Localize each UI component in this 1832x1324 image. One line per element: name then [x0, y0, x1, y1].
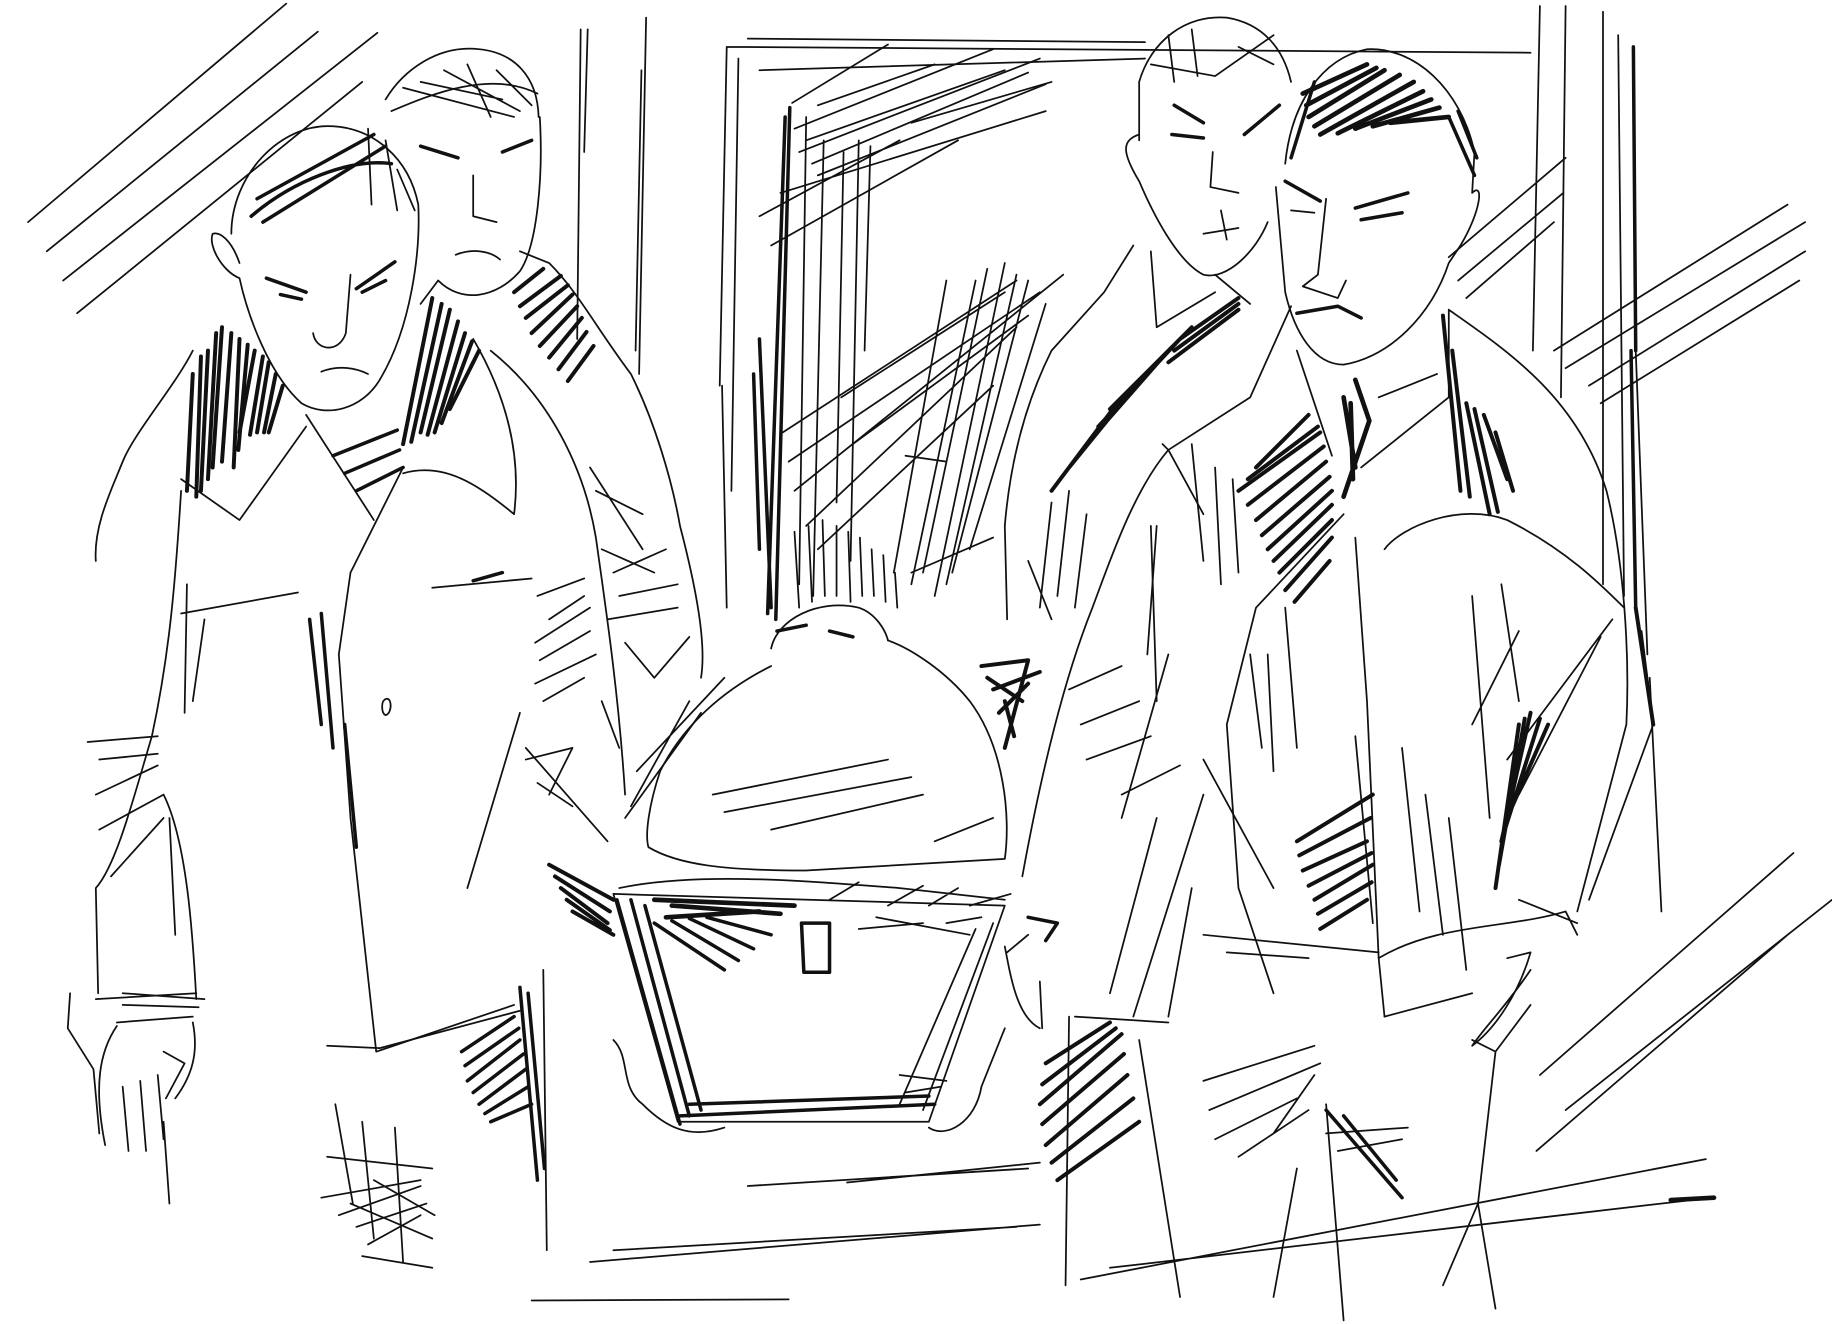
right sleeve hatching — [1472, 584, 1653, 900]
hair and head — [1276, 49, 1479, 365]
dark shoulder hatching — [514, 269, 594, 381]
collar and shirt — [181, 339, 516, 520]
dark hatching at right shoulder — [981, 660, 1040, 748]
dark hair — [1303, 64, 1449, 134]
floor lines — [532, 1159, 1714, 1301]
dark trouser hatching — [1040, 1022, 1139, 1180]
head — [212, 126, 419, 410]
jacket outline — [1022, 310, 1627, 911]
background hatching top left — [28, 4, 377, 313]
legs — [1066, 1017, 1496, 1320]
dark collar hatching — [403, 298, 479, 444]
collar and tie — [1163, 306, 1449, 514]
background window and hatching — [720, 39, 1531, 619]
hand — [68, 993, 195, 1204]
figure: back right man — [1005, 17, 1291, 993]
face — [1285, 181, 1408, 220]
dark shoulder hatching — [1443, 316, 1513, 514]
background vertical door frame left — [577, 18, 646, 374]
dark chest hatching — [1238, 415, 1332, 602]
dark coat hatching — [1297, 795, 1373, 929]
dark lid shading — [654, 900, 794, 917]
left sleeve — [88, 736, 196, 999]
figure: front right man — [1022, 49, 1653, 1320]
background hatching bottom right — [1536, 853, 1832, 1151]
figure: back left man — [386, 49, 703, 748]
right arm hatching — [535, 578, 596, 701]
dark trouser hatching — [462, 987, 544, 1180]
coat hem and lower — [1379, 911, 1577, 1017]
figure: front left man — [68, 126, 625, 1268]
face — [266, 262, 395, 299]
background right door frame and hatching — [1449, 6, 1805, 911]
hand right — [1472, 900, 1577, 1052]
dark shoulder hatching — [1052, 298, 1238, 491]
dark left shoulder hatching — [187, 327, 283, 497]
body outline — [96, 351, 625, 993]
figure: coffin carried head — [625, 605, 1040, 871]
coffin — [549, 865, 1057, 1132]
lower leg scribble — [321, 1104, 435, 1268]
